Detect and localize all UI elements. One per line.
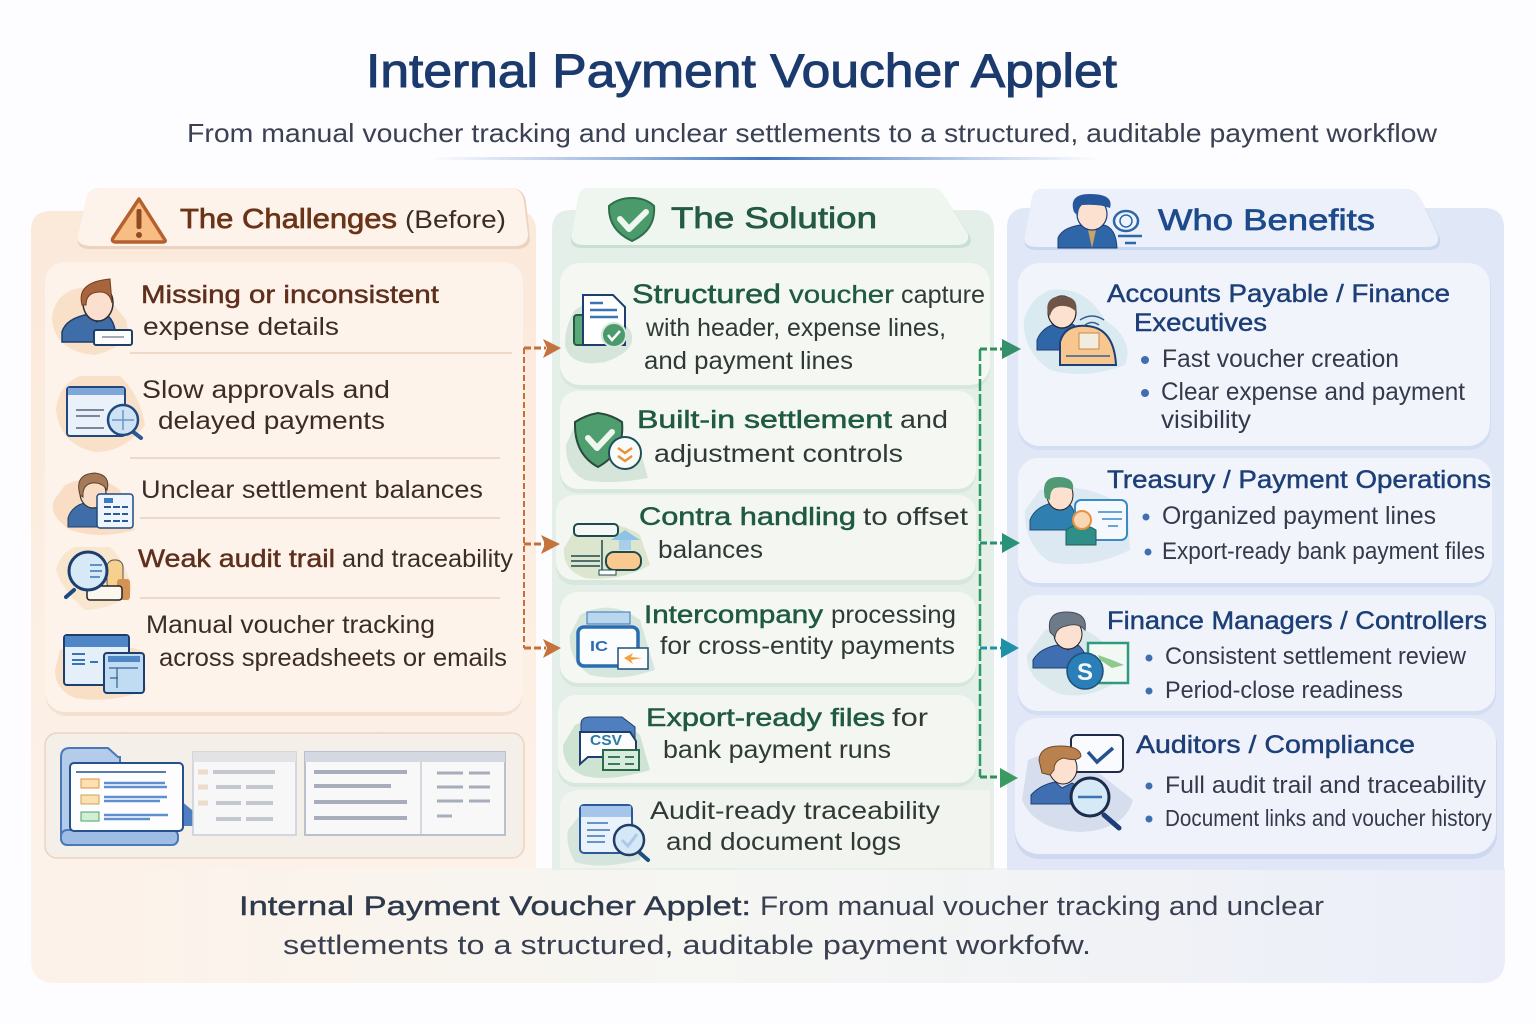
challenges card [45,262,523,716]
card text: to offset [863,503,968,531]
card text: Organized payment lines [1162,502,1436,530]
title underline [430,157,1100,160]
card text: for [892,704,928,732]
item text: Missing or inconsistent [141,281,439,309]
card: structured capture [560,263,990,389]
icon: auditor with magnifier [1022,735,1133,832]
card text [1107,280,1465,434]
table thumbnail right [305,752,505,835]
footer text [239,891,1324,960]
card text: balances [658,536,763,564]
footer text: Internal Payment Voucher Applet: [239,891,751,921]
footer band [31,868,1505,983]
card text: Export-ready bank payment files [1162,538,1485,565]
icon: warning triangle [112,199,165,242]
item: weak audit trail [56,545,514,610]
card text: and document logs [666,828,901,856]
card text: Export-ready files [646,704,885,732]
card text: capture [901,281,985,309]
card text [1136,731,1492,831]
card text [639,503,968,564]
panel: challenges [31,188,536,868]
icon: folder with voucher list [61,748,205,845]
icon: IC screen [570,608,655,678]
card text: and [900,406,948,434]
card: finance managers [1018,595,1496,715]
card text: Accounts Payable / Finance [1107,280,1450,308]
card: auditors [1015,718,1497,859]
arrows: solution to beneficiaries [980,339,1021,788]
icon: manager with coin: S [1077,659,1093,686]
card text: Treasury / Payment Operations [1107,466,1491,494]
column background [1007,208,1504,870]
icon: spreadsheet windows [55,635,146,700]
card text: Contra handling [639,503,856,531]
subtitle: From manual voucher tracking and unclear settlements to a structured, auditable payment workflow [187,118,1437,148]
card text [1107,466,1491,565]
card: settlement controls [560,391,976,493]
icon: window and magnifier [56,376,145,452]
heading text: The Challenges [180,203,397,234]
item text [142,376,390,435]
card: export files [558,695,976,787]
tab heading [78,188,530,249]
item text: Slow approvals and [142,376,390,404]
card text: Period-close readiness [1165,677,1403,704]
title: Internal Payment Voucher Applet [366,44,1117,97]
icon: CSV file [563,717,650,778]
card text: Full audit trail and traceability [1165,772,1486,799]
card text [1107,607,1487,704]
heading text: Who Benefits [1158,204,1375,237]
item: missing details [52,279,439,355]
item text: Manual voucher tracking [146,611,435,639]
card text: and payment lines [644,347,853,375]
card text: Auditors / Compliance [1136,731,1415,759]
card text: bank payment runs [663,736,891,764]
item: manual tracking [55,611,507,700]
card text: Built-in settlement [637,406,892,434]
item text: delayed payments [158,407,385,435]
card text: Audit-ready traceability [650,797,941,825]
item text [146,611,507,672]
icon: treasury people [1025,477,1130,564]
footer text: settlements to a structured, auditable payment workfofw. [283,930,1091,960]
card text: adjustment controls [654,440,903,468]
card text: voucher [789,281,894,309]
item text [138,545,514,573]
item: slow approvals [56,376,390,452]
card text: Consistent settlement review [1165,643,1467,670]
icon: log with magnifier [567,805,648,866]
icon: green shield check [609,198,654,241]
item text: Unclear settlement balances [141,476,483,504]
column background [552,210,994,870]
card text: Structured [632,279,781,309]
panel: who benefits [1007,189,1504,870]
icon: IC screen: IC [590,638,608,655]
card text: Intercompany [644,601,824,629]
table thumbnail left [193,752,296,835]
card text: Document links and voucher history [1165,805,1492,831]
icon: shield with chat bubble [566,413,648,482]
card: treasury [1018,458,1492,587]
item text [141,281,439,341]
screenshot strip [45,733,524,858]
card: accounts payable [1018,263,1491,450]
icon: magnifier with bottle [56,547,132,610]
tab heading [571,188,971,248]
card text [637,406,948,468]
item text: Weak audit trail [138,545,335,573]
item text: and traceability [342,545,514,573]
card text: Clear expense and payment [1161,378,1465,406]
card: intercompany [560,592,976,687]
card text [646,704,928,764]
card: contra handling [556,495,976,585]
icon: contra flow [564,524,650,579]
icon: person with sheet [53,473,135,535]
icon: person with magnifier [1058,194,1142,248]
icon: manager with coin [1027,612,1128,695]
item text: across spreadsheets or emails [159,644,507,672]
card text [644,601,956,660]
icon: finance executive [1024,289,1128,374]
card text: processing [831,601,956,629]
tab heading [1025,189,1440,250]
footer text: From manual voucher tracking and unclear [760,891,1324,921]
card text [650,797,941,856]
tab heading: (Before) [405,206,506,234]
panel: solution [552,188,994,870]
card: audit logs [560,790,990,868]
icon: person with card [52,279,132,355]
arrows: challenges to solution [524,339,561,658]
icon: CSV file: CSV [590,732,622,749]
card text: for cross-entity payments [660,632,955,660]
card text [632,279,985,375]
card text: Fast voucher creation [1162,345,1399,373]
card text: with header, expense lines, [645,314,946,342]
heading text: The Solution [671,202,877,235]
card text: visibility [1161,406,1252,434]
column background [31,211,536,868]
item: settlement balances [53,473,483,535]
card text: Executives [1134,309,1267,337]
card text: Finance Managers / Controllers [1107,607,1487,635]
item text: expense details [143,313,339,341]
icon: document check [565,295,632,363]
